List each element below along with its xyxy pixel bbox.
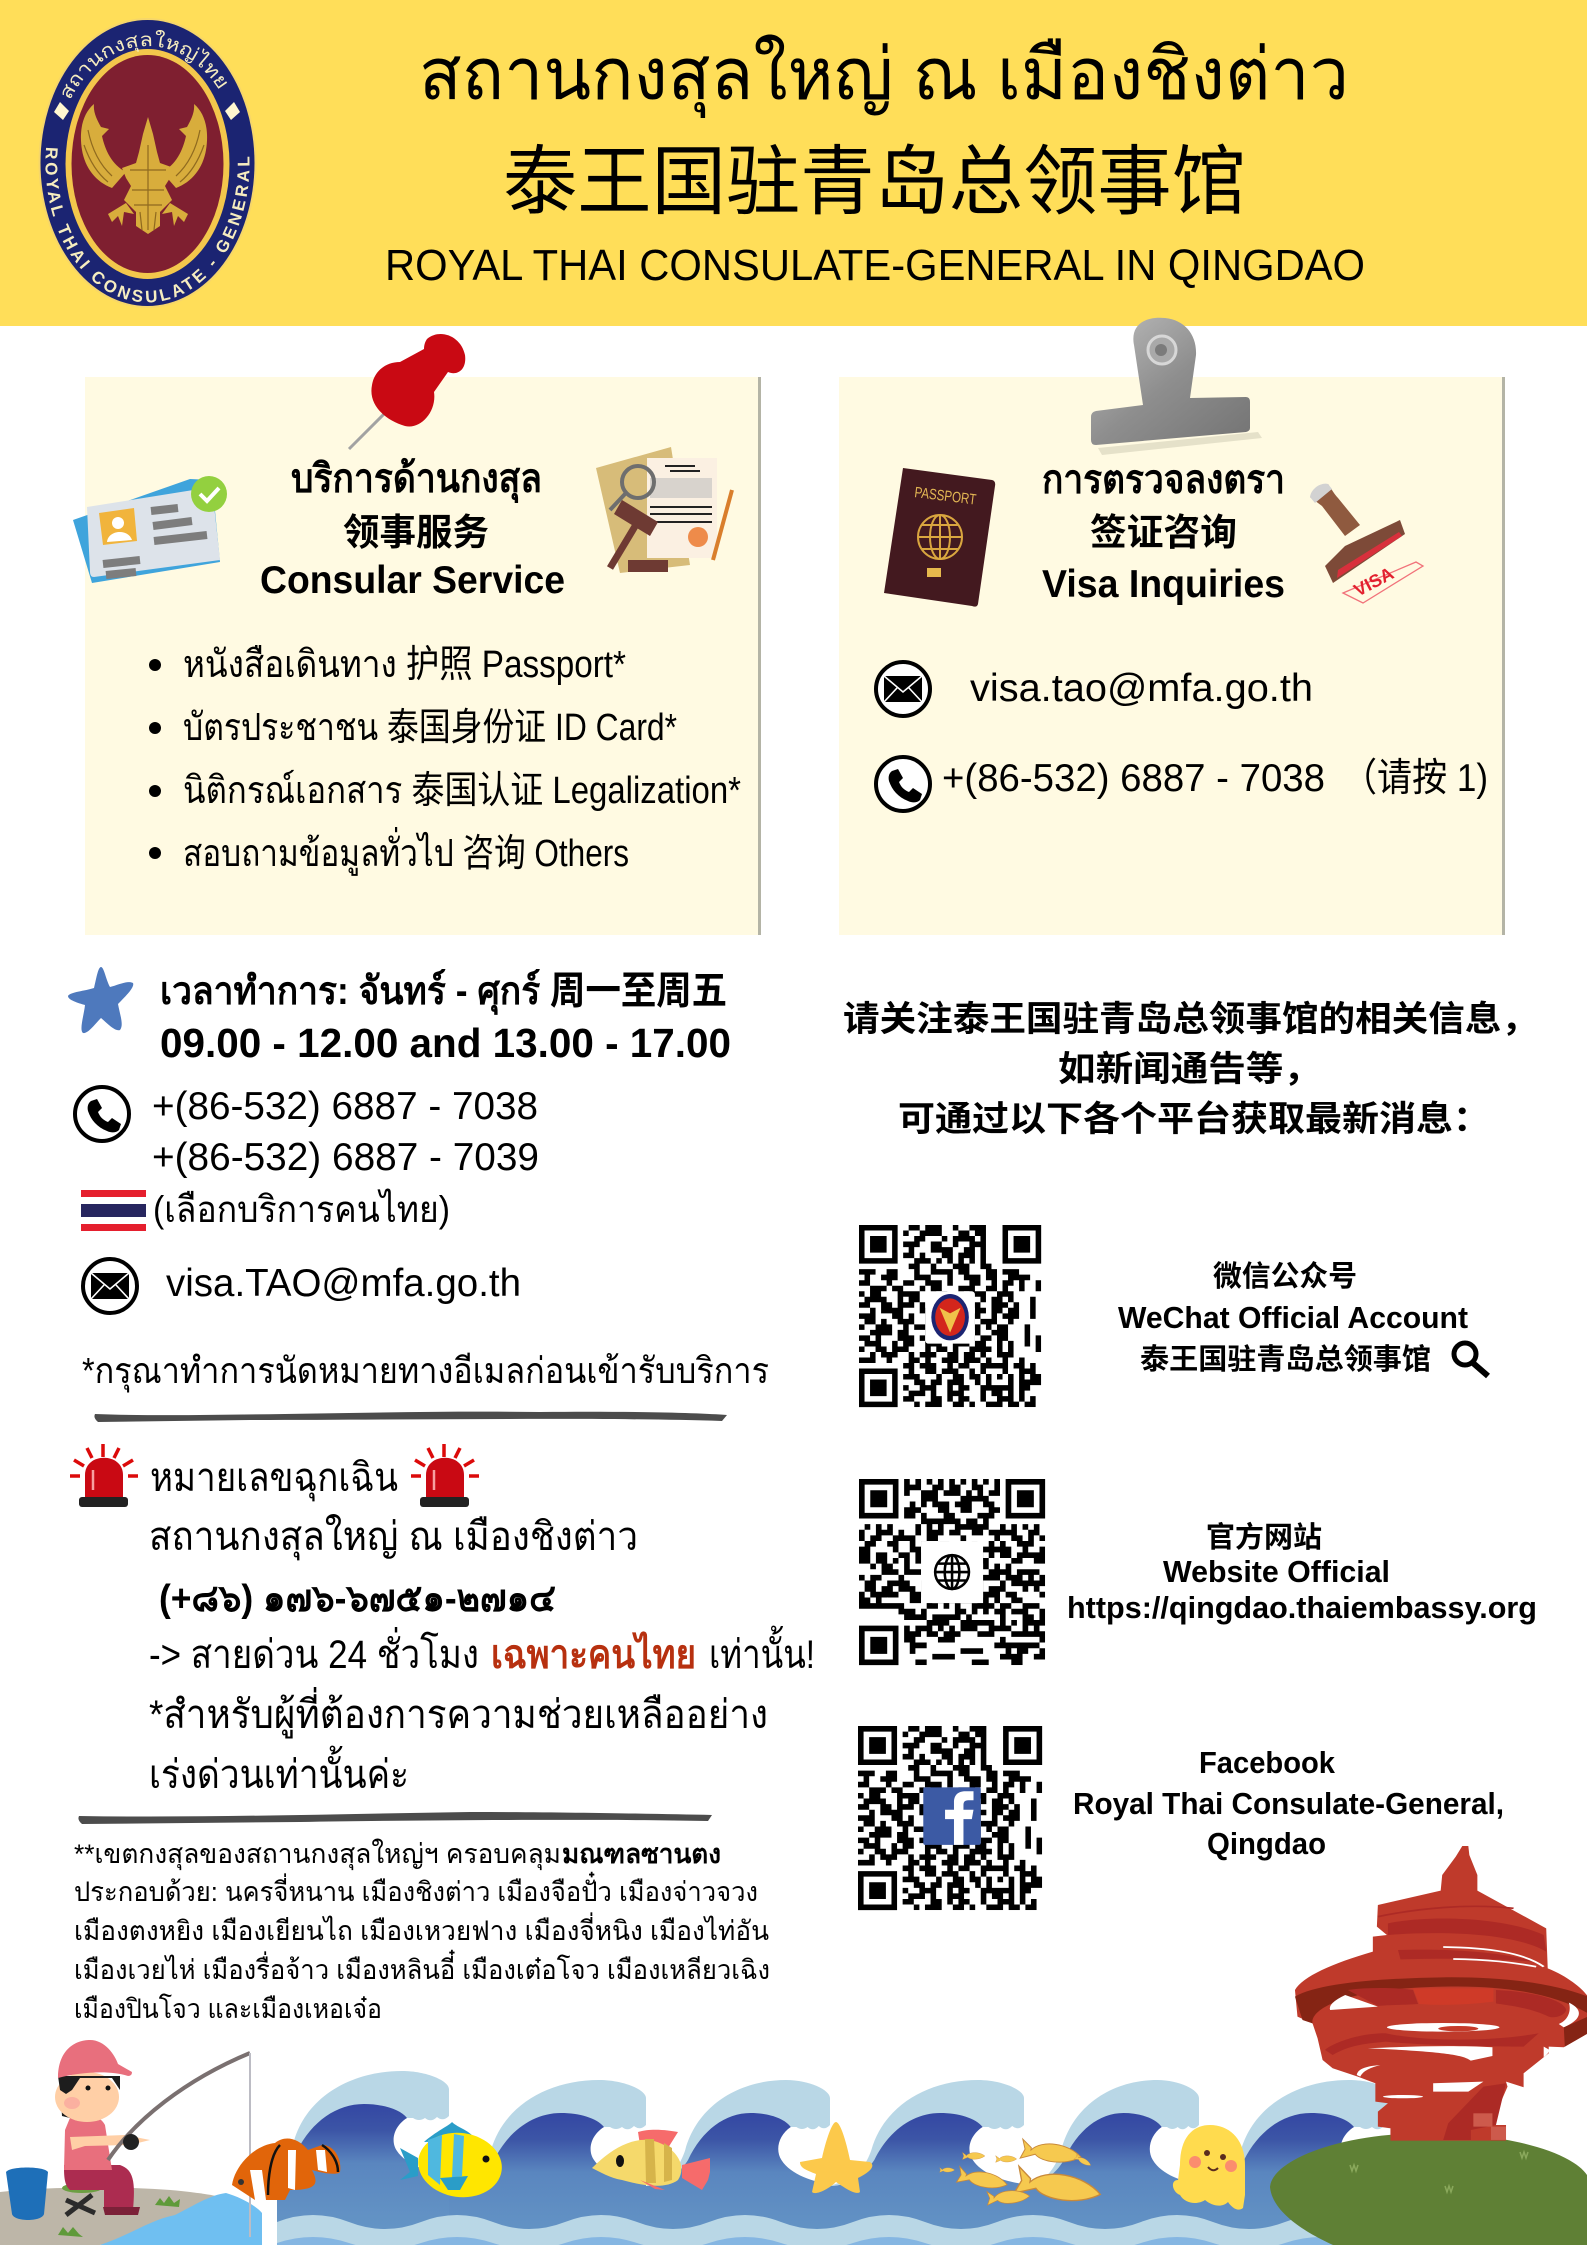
title: Thai: สถานกงสุลใหญ่ ณ เมืองชิงต่าว — [419, 34, 1349, 118]
text: emergency details: สถานกงสุลใหญ่ ณ เมืองชิงต่าว — [149, 1513, 638, 1561]
emblem: garuda — [81, 104, 207, 234]
QR code: WeChat — [859, 1225, 1041, 1407]
text: consular jurisdiction: เมืองเวยไห่ เมืองรื่อจ้าว เมืองหลินอี๋ เมืองเต๋อโจว เมืองเหลียวเฉิง — [74, 1950, 770, 1985]
opening hours — [160, 968, 731, 1066]
heading: consular service: บริการด้านกงสุล — [291, 457, 542, 504]
title: English: ROYAL THAI CONSULATE-GENERAL IN QINGDAO — [385, 241, 1365, 290]
text: phone numbers — [152, 1085, 539, 1179]
heading: visa inquiries: การตรวจลงตรา — [1042, 458, 1285, 502]
list: consular services: นิติกรณ์เอกสาร 泰国认证 Legalization* — [183, 769, 741, 812]
starfish — [800, 2122, 872, 2193]
text: visa phone: +(86-532) 6887 - 7038 — [942, 757, 1325, 800]
icon: ID card — [73, 476, 227, 583]
list: consular services: หนังสือเดินทาง 护照 Passport* — [183, 644, 626, 686]
octopus — [1173, 2125, 1245, 2210]
icon: email — [83, 1259, 137, 1313]
heading: consular service: 领事服务 — [343, 512, 489, 553]
consulate emblem — [38, 18, 256, 308]
text: follow notice: 请关注泰王国驻青岛总领事馆的相关信息， — [843, 1000, 1538, 1039]
panel: consular service — [73, 334, 761, 935]
text: emergency details: -> สายด่วน 24 ชั่วโมง — [149, 1627, 479, 1677]
heading: visa inquiries — [1042, 458, 1285, 606]
text: website: https://qingdao.thaiembassy.org — [1067, 1590, 1537, 1625]
list: consular services — [149, 644, 741, 876]
icon: bucket — [6, 2168, 48, 2220]
text: phone numbers: +(86-532) 6887 - 7039 — [152, 1136, 539, 1179]
panel: visa inquiries — [839, 318, 1505, 935]
text: emergency details: เท่านั้น! — [709, 1625, 815, 1677]
list: consular services: บัตรประชาชน 泰国身份证 ID Card* — [183, 707, 677, 749]
text: website — [1067, 1521, 1537, 1625]
waves — [252, 2071, 1396, 2245]
icon: visa stamp: VISA — [1350, 563, 1397, 601]
text: follow notice: 可通过以下各个平台获取最新消息： — [898, 1100, 1490, 1139]
text: WeChat: WeChat Official Account — [1118, 1300, 1468, 1335]
icon: legal documents with gavel — [596, 447, 732, 573]
school of golden fish — [940, 2139, 1103, 2208]
opening hours: เวลาทำการ: จันทร์ - ศุกร์ 周一至周五 — [160, 968, 727, 1015]
consulate emblem: สถานกงสุลใหญ่ไทย — [62, 30, 228, 98]
title: Chinese: 泰王国驻青岛总领事馆 — [503, 140, 1246, 225]
text: consular jurisdiction: เมืองตงหยิง เมืองเยียนไถ เมืองเหวยฟาง เมืองจี่หนิง เมืองไท่อัน — [74, 1912, 769, 1946]
text: emergency details: เฉพาะคนไทย — [491, 1631, 696, 1677]
heading: visa inquiries: Visa Inquiries — [1042, 563, 1285, 606]
text: Thai service option: (เลือกบริการคนไทย) — [153, 1188, 450, 1230]
text: consular jurisdiction: ประกอบด้วย: นครจี่หนาน เมืองชิงต่าว เมืองจือปั๋ว เมืองจ่าวจวง — [74, 1872, 758, 1907]
island — [1270, 2133, 1587, 2245]
QR code: website — [859, 1479, 1045, 1665]
icon: siren left — [70, 1444, 138, 1507]
text: visa email: visa.tao@mfa.go.th — [970, 667, 1313, 710]
icon: email — [876, 662, 930, 716]
icon: passport — [884, 468, 995, 607]
text: Facebook: Facebook — [1199, 1745, 1336, 1780]
icon: blue starfish — [68, 967, 133, 1033]
text: Facebook: Royal Thai Consulate-General, — [1073, 1786, 1504, 1821]
icon: phone — [876, 757, 930, 811]
text: email: visa.TAO@mfa.go.th — [166, 1262, 521, 1305]
text: Facebook: Qingdao — [1207, 1826, 1326, 1861]
icon: siren right — [411, 1444, 479, 1507]
text: follow notice: 如新闻通告等， — [1058, 1050, 1321, 1089]
text: follow notice — [843, 1000, 1538, 1139]
text: visa phone: （请按 1) — [1342, 757, 1488, 800]
list: consular services: สอบถามข้อมูลทั่วไป 咨询 Others — [183, 827, 629, 876]
icon: metal clip — [1091, 318, 1262, 455]
opening hours: 09.00 - 12.00 and 13.00 - 17.00 — [160, 1020, 731, 1066]
text: WeChat: 泰王国驻青岛总领事馆 — [1140, 1343, 1431, 1376]
text: consular jurisdiction: เมืองปินโจว และเมืองเหอเจ๋อ — [74, 1994, 382, 2024]
shore and water — [0, 2188, 262, 2245]
text: phone numbers: +(86-532) 6887 - 7038 — [152, 1085, 538, 1128]
text: website: 官方网站 — [1206, 1521, 1322, 1554]
text: emergency details: เร่งด่วนเท่านั้นค่ะ — [149, 1745, 409, 1797]
text: Facebook — [1073, 1745, 1504, 1861]
text: consular jurisdiction: มณฑลซานตง — [562, 1839, 721, 1869]
heading: visa inquiries: 签证咨询 — [1090, 512, 1237, 553]
text: WeChat — [1118, 1260, 1468, 1376]
yellow striped fish — [400, 2122, 506, 2203]
Qingdao May Fourth Square tower — [1295, 1846, 1587, 2141]
fisher illustration — [6, 2040, 250, 2237]
heading: consular service: Consular Service — [260, 559, 565, 602]
icon: visa stamp — [1310, 484, 1423, 603]
consulate emblem: ROYAL THAI CONSULATE - GENERAL — [45, 148, 250, 302]
clownfish — [232, 2139, 340, 2200]
text: WeChat: 微信公众号 — [1213, 1260, 1357, 1293]
text: emergency details — [149, 1513, 815, 1797]
text: appointment note: *กรุณาทำการนัดหมายทางอีเมลก่อนเข้ารับบริการ — [82, 1350, 769, 1393]
text: emergency details: *สำหรับผู้ที่ต้องการความช่วยเหลืออย่าง — [149, 1687, 768, 1738]
text: consular jurisdiction: **เขตกงสุลของสถานกงสุลใหญ่ฯ ครอบคลุม — [74, 1838, 561, 1871]
text: emergency heading: หมายเลขฉุกเฉิน — [150, 1456, 398, 1502]
icon: passport: PASSPORT — [914, 484, 977, 509]
icon: Thai flag — [81, 1190, 146, 1231]
header band — [0, 0, 1587, 326]
text: website: Website Official — [1163, 1554, 1390, 1589]
QR code: Facebook — [858, 1726, 1042, 1910]
text: emergency details: (+๘๖) ๑๗๖-๖๗๕๑-๒๗๑๔ — [159, 1578, 556, 1620]
striped reef fish — [592, 2130, 710, 2190]
text: consular jurisdiction — [74, 1838, 770, 2024]
icon: phone — [75, 1087, 129, 1141]
icon: red push pin — [349, 334, 465, 449]
heading: consular service — [260, 457, 565, 602]
icon: magnifier — [1454, 1343, 1488, 1376]
